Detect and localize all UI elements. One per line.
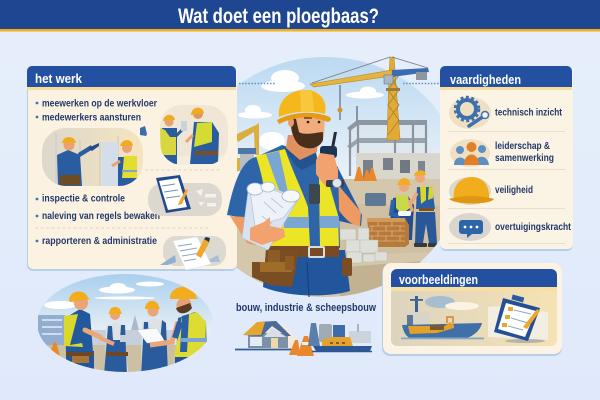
central construction scene (236, 57, 440, 297)
task list 1: medewerkers aansturen (42, 112, 141, 124)
worker 2 (100, 307, 128, 375)
icon: checklist (488, 295, 548, 343)
sectors caption: bouw, industrie & scheepsbouw (236, 302, 376, 314)
hand on radio (316, 153, 338, 187)
title: Wat doet een ploegbaas? (178, 5, 379, 28)
worker 1 (64, 291, 100, 375)
worker 3 (137, 301, 168, 375)
hard hat (277, 90, 331, 124)
neck (286, 135, 318, 160)
heading: voorbeeldingen (399, 272, 478, 287)
crane (310, 57, 429, 140)
generator (365, 193, 386, 206)
icon: blue pointer (140, 126, 147, 136)
panel: voorbeeldingen (382, 263, 562, 356)
arm: holding radio (328, 166, 362, 226)
building (347, 106, 440, 180)
skill: overtuigingskracht: overtuigingskracht (495, 221, 571, 233)
worker in vest (112, 140, 137, 186)
title banner (0, 0, 600, 32)
icon: ship (401, 296, 484, 339)
team meeting illustration (37, 274, 213, 375)
icon: safety helmet (449, 177, 494, 205)
worker laying bricks (390, 178, 414, 240)
worker pointing (57, 137, 99, 186)
foreman (227, 90, 362, 297)
radio strap (309, 184, 320, 204)
traffic cones (354, 167, 377, 181)
connector: left dotted line (239, 82, 275, 84)
skill: leiderschap en samenwerking (495, 140, 554, 164)
clouds (238, 70, 384, 150)
worker 4 (150, 286, 206, 364)
scene: colleagues instructing (160, 105, 228, 164)
left arm and sleeve (227, 157, 283, 245)
cone (51, 342, 60, 356)
worker standing (410, 170, 437, 247)
torso (254, 145, 340, 248)
icon: clipboard (148, 175, 222, 216)
icon: house (235, 321, 297, 350)
hand on blueprints (250, 217, 285, 245)
skill: veiligheid: veiligheid (495, 184, 533, 196)
wristwatch (326, 178, 344, 188)
heading: het werk (35, 71, 83, 86)
icon: team (450, 139, 490, 167)
excavator (237, 123, 259, 172)
task list 2 (36, 192, 160, 222)
belt (268, 246, 339, 257)
worker right (186, 108, 219, 164)
high-visibility vest (256, 149, 339, 246)
tool pouch (252, 250, 352, 287)
scene: pointing foreman (42, 128, 143, 186)
skill: technisch inzicht: technisch inzicht (495, 106, 562, 118)
icon: gear and wrench (449, 97, 491, 129)
panel: vaardigheden (440, 66, 573, 251)
skill: leiderschap en samenwerking: leiderschap & (495, 140, 550, 152)
brick wall (367, 218, 409, 247)
icon: factory and ship (308, 323, 372, 352)
task list 3: rapporteren & administratie (42, 235, 157, 247)
icon: traffic cones (289, 336, 314, 356)
icon: report paper and pen (160, 236, 226, 270)
task list 1: meewerken op de werkvloer (42, 98, 157, 110)
heading: vaardigheden (450, 72, 521, 87)
shirt collar (282, 145, 318, 170)
head (288, 115, 325, 148)
connector: right dotted line (403, 82, 440, 84)
task list 2: naleving van regels bewaken (42, 210, 160, 222)
skill: leiderschap en samenwerking: samenwerking (495, 152, 554, 164)
task list 2: inspectie & controle (42, 192, 125, 204)
task list 1 (36, 98, 157, 124)
worker left (160, 115, 182, 164)
icon: speech bubble (449, 213, 491, 241)
cloud (425, 296, 479, 310)
walkie-talkie (318, 132, 337, 176)
trousers (263, 250, 350, 295)
concrete blocks (340, 228, 387, 263)
rolled blueprints (242, 182, 300, 250)
panel: het werk (27, 66, 237, 271)
ground (236, 179, 440, 297)
